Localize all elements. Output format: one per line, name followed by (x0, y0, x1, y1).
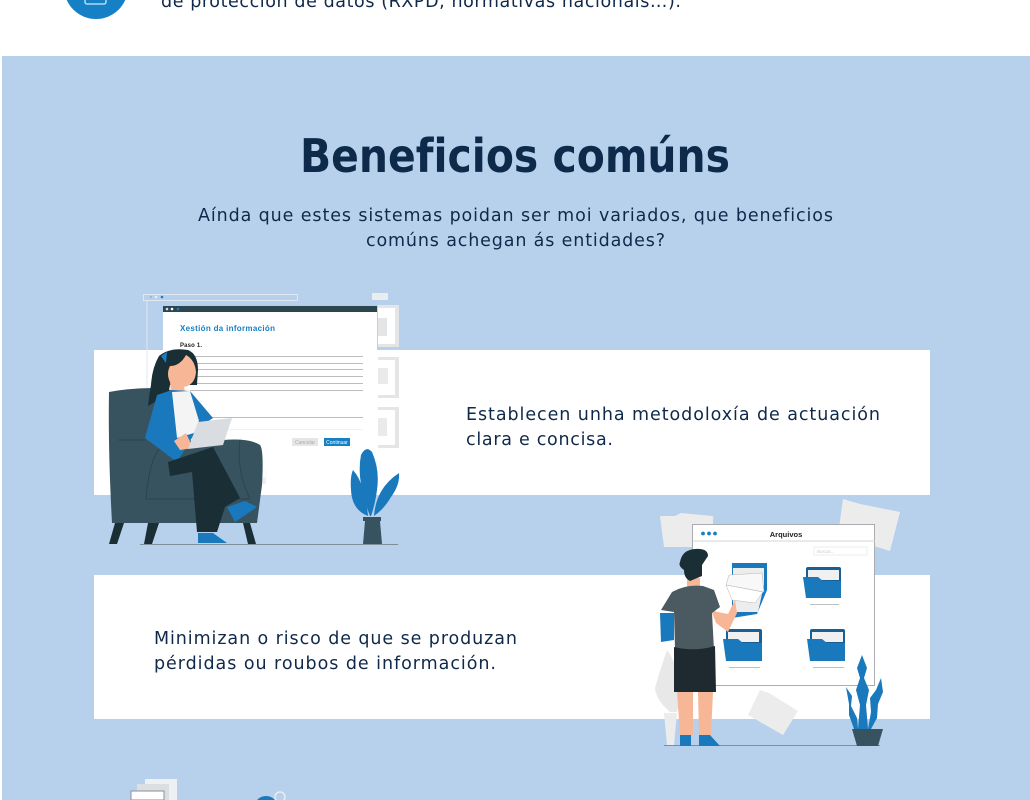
panel: benefit band 2 (94, 575, 930, 719)
form window (163, 306, 377, 484)
benefit text 2: Minimizan o risco de que se produzan (154, 629, 517, 649)
blue plant (846, 655, 883, 746)
man (660, 549, 737, 746)
intro text: comúns achegan ás entidades? (366, 231, 665, 251)
grey plant (655, 650, 680, 745)
form window: Continuar (326, 440, 348, 446)
ground line (140, 544, 398, 546)
armchair (109, 388, 263, 544)
benefit text 2: pérdidas ou roubos de información. (154, 654, 496, 674)
panel: benefit band 1 (94, 350, 930, 495)
open folder (726, 563, 767, 618)
intro text (198, 206, 833, 251)
files window: Arquivos (770, 530, 802, 539)
icon: blue circle badge (64, 0, 128, 19)
benefit text 2 (154, 629, 517, 674)
benefit text 1: clara e concisa. (466, 430, 613, 450)
ground line (664, 744, 880, 746)
floating grey folders (660, 499, 900, 735)
benefit text 1 (466, 405, 880, 450)
top section remnant (64, 0, 681, 19)
intro text: Aínda que estes sistemas poidan ser moi variados, que beneficios (198, 206, 833, 226)
folder icons (723, 567, 845, 668)
illustration: bottom cropped documents (131, 779, 177, 800)
illustration: woman with laptop in armchair (109, 293, 399, 544)
files window (692, 524, 875, 686)
form window: Cancelar (295, 440, 315, 446)
icon: bottom blue circle (254, 792, 285, 800)
illustration: man browsing folders (655, 499, 900, 746)
benefit text 1: Establecen unha metodoloxía de actuación (466, 405, 880, 425)
form window: Xestión da información (180, 324, 275, 333)
form window: Paso 1. (180, 343, 202, 349)
files window: Buscar... (817, 549, 835, 554)
side frames (372, 293, 399, 448)
heading: Beneficios comúns (300, 129, 730, 183)
plant (351, 449, 399, 544)
woman (145, 349, 257, 543)
background window outline (144, 294, 298, 395)
